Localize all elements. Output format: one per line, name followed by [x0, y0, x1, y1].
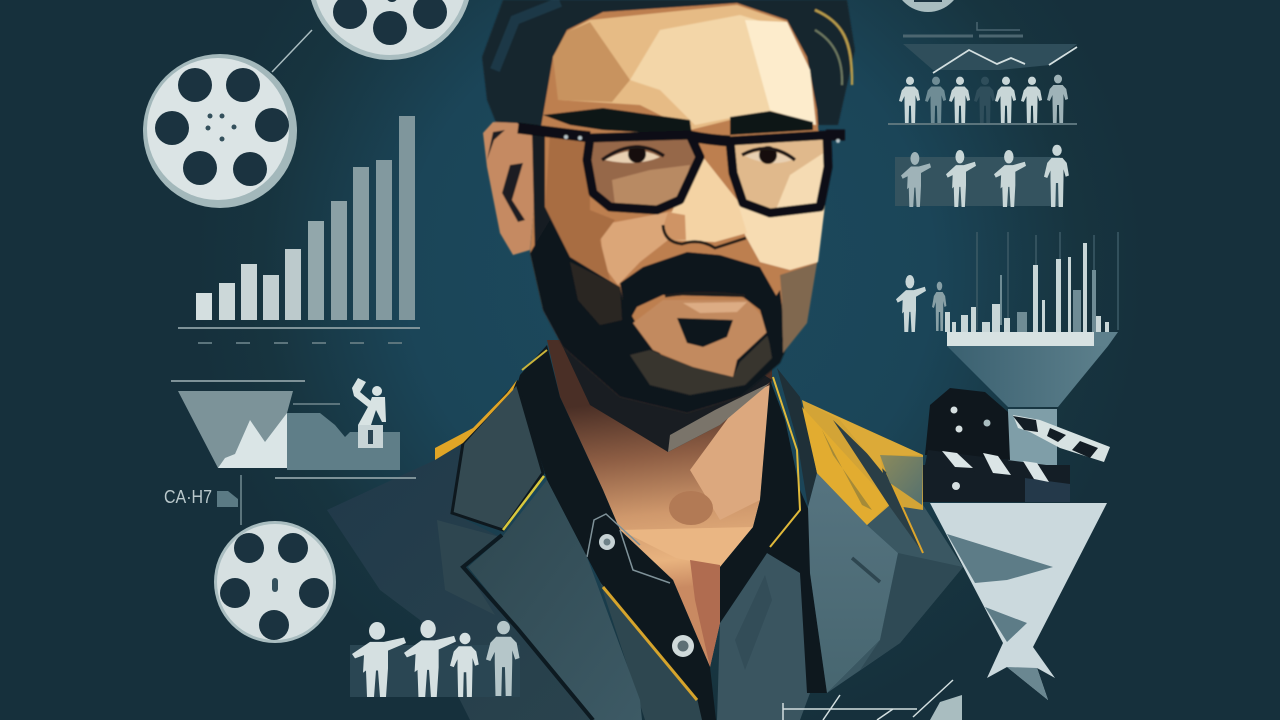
right yellow collar [802, 407, 890, 525]
left lower lapel [468, 480, 642, 720]
icon: figure on box [352, 378, 386, 448]
left cheek shade [545, 130, 615, 280]
ear [483, 122, 540, 255]
hair [482, 0, 855, 125]
funnel lower light [930, 503, 1107, 700]
shirt grey lower [600, 582, 702, 720]
eye right [742, 146, 795, 164]
city bar chart [945, 232, 1118, 346]
icon: film reel lower left [214, 521, 336, 643]
shirt black [517, 345, 716, 720]
icon: film reel left [143, 54, 297, 208]
lens left shading [587, 137, 700, 210]
face base [530, 3, 823, 413]
lips [683, 302, 747, 313]
sideburn [532, 130, 570, 260]
bar chart [178, 116, 420, 343]
right black placket [720, 380, 827, 693]
right collar strip [777, 368, 817, 507]
line chart bottom [783, 680, 962, 720]
small chart glyph [217, 491, 238, 507]
beard [530, 220, 787, 413]
people beside city chart [896, 275, 946, 332]
moustache [620, 252, 783, 363]
shoulder yellow stripe [435, 380, 517, 460]
clapperboard [923, 388, 1110, 502]
funnel chart left [171, 381, 416, 525]
chest skin [547, 340, 772, 667]
button top [599, 534, 615, 550]
chin skin [633, 300, 767, 377]
eyebrows [543, 108, 692, 135]
cheek planes [735, 190, 825, 270]
chart: line over panel [903, 22, 1077, 73]
jacket left body [327, 443, 600, 720]
forehead highlight [553, 5, 815, 130]
collar yellow trim left [522, 350, 547, 370]
people row one [888, 75, 1077, 124]
chin stubble [630, 335, 772, 395]
people group lower left [350, 620, 520, 697]
button lower [672, 635, 694, 657]
funnel right [947, 346, 1108, 407]
beard mottled left [570, 262, 622, 325]
lens right shading [730, 135, 828, 213]
neck shadow [555, 330, 772, 452]
icon: film reel top right [894, 0, 962, 12]
icon: film reel top centre [272, 0, 472, 72]
right lapel [808, 473, 898, 693]
soul patch [677, 318, 733, 347]
eye left [602, 145, 664, 163]
right jacket body [827, 490, 963, 693]
left upper lapel [452, 383, 543, 530]
portrait head [482, 0, 855, 413]
panel under funnel [1008, 409, 1057, 470]
small label text: CA·H7 [164, 487, 212, 507]
right cheek stubble [780, 263, 817, 353]
right shirt panel [717, 553, 810, 720]
nose [667, 157, 747, 242]
right yellow collar base [802, 400, 923, 525]
jacket and shirt [327, 330, 963, 720]
glasses [518, 128, 845, 213]
people row two [895, 145, 1069, 207]
